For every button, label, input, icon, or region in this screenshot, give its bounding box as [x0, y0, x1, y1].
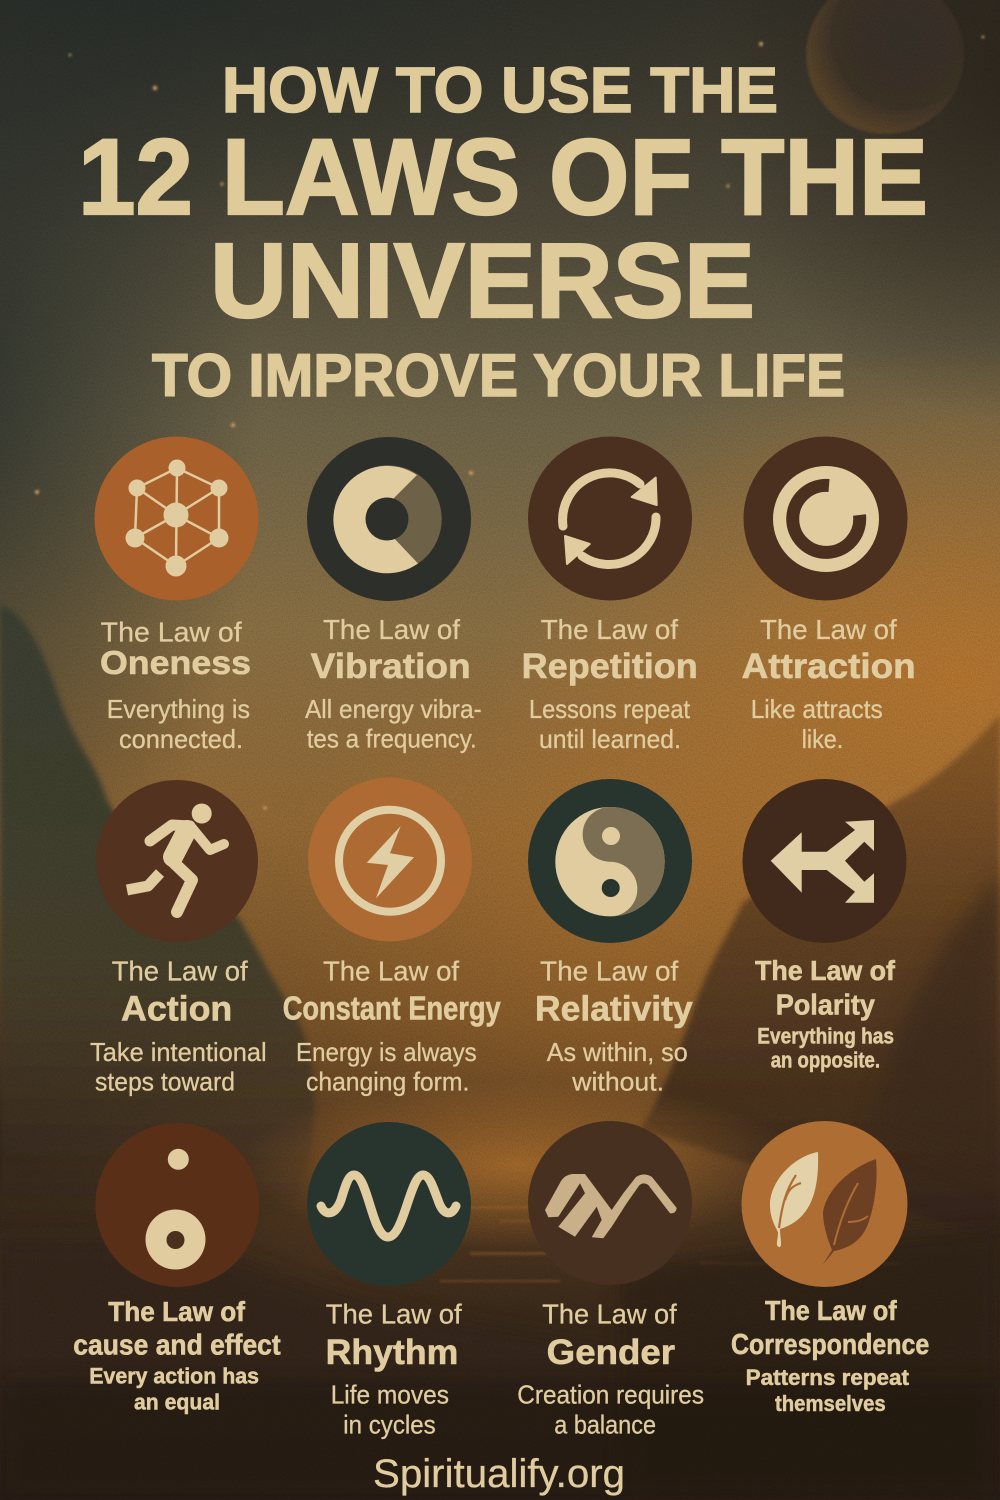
- label: repetition: [522, 614, 698, 754]
- panel: law of constant energy: [283, 778, 501, 1097]
- label: oneness: connected.: [119, 724, 243, 754]
- label: vibration: All energy vibra-: [305, 694, 482, 724]
- icon: dot and ring: [95, 1123, 259, 1287]
- icon: diverging arrows: [742, 779, 906, 943]
- icon: attraction spiral: [744, 436, 908, 600]
- panel: law of polarity: [742, 779, 906, 1073]
- label: correspondence: The Law of: [765, 1295, 897, 1326]
- label: relativity: The Law of: [540, 956, 679, 987]
- label: cause and effect: The Law of: [108, 1296, 246, 1327]
- title line: how to use the: HOW TO USE THE: [222, 54, 778, 126]
- label: gender: a balance: [554, 1409, 656, 1439]
- label: rhythm: The Law of: [326, 1298, 462, 1329]
- label: cause and effect: cause and effect: [73, 1329, 281, 1361]
- label: attraction: Like attracts: [751, 694, 883, 724]
- title line: 12 laws of the: 12 LAWS OF THE: [78, 116, 928, 237]
- panel: law of rhythm: [307, 1122, 471, 1439]
- label: rhythm: in cycles: [343, 1409, 436, 1439]
- label: rhythm: [326, 1298, 462, 1439]
- label: cause and effect: an equal: [134, 1389, 220, 1414]
- icon: lightning bolt: [308, 778, 472, 942]
- label: action: The Law of: [112, 956, 248, 987]
- label: gender: Gender: [547, 1333, 675, 1372]
- label: gender: The Law of: [542, 1298, 677, 1329]
- label: repetition: Repetition: [522, 647, 698, 686]
- label: attraction: The Law of: [760, 614, 897, 645]
- label: cause and effect: [73, 1296, 281, 1414]
- label: action: Take intentional: [90, 1037, 267, 1067]
- label: polarity: [755, 955, 896, 1073]
- label: action: [90, 956, 267, 1097]
- label: constant energy: [283, 956, 501, 1097]
- label: vibration: The Law of: [323, 614, 460, 645]
- label: oneness: [100, 616, 251, 754]
- icon: vibration ring: [307, 437, 471, 601]
- label: action: steps toward: [95, 1067, 235, 1097]
- footer: site name: Spiritualify.org: [373, 1452, 625, 1496]
- label: correspondence: [731, 1295, 929, 1416]
- icon: interlocking peaks: [528, 1121, 692, 1285]
- label: relativity: [535, 956, 693, 1097]
- label: vibration: [305, 614, 482, 754]
- label: repetition: until learned.: [539, 724, 681, 754]
- icon: circular arrows: [528, 436, 692, 600]
- label: rhythm: Life moves: [331, 1379, 449, 1409]
- label: polarity: Polarity: [776, 989, 875, 1021]
- label: polarity: The Law of: [755, 955, 896, 986]
- panel: law of relativity: [528, 779, 693, 1097]
- panel: law of attraction: [742, 436, 916, 754]
- label: cause and effect: Every action has: [89, 1363, 259, 1388]
- icon: wave: [307, 1122, 471, 1286]
- icon: two leaves: [742, 1121, 908, 1287]
- panel: law of vibration: [305, 437, 482, 754]
- icon: running figure: [96, 780, 258, 942]
- panel: law of action: [90, 780, 267, 1097]
- label: repetition: Lessons repeat: [529, 694, 691, 724]
- label: constant energy: changing form.: [306, 1067, 469, 1097]
- label: vibration: tes a frequency.: [307, 724, 477, 754]
- label: rhythm: Rhythm: [326, 1333, 458, 1372]
- label: oneness: Oneness: [100, 644, 251, 681]
- title line: universe: UNIVERSE: [210, 222, 755, 340]
- label: constant energy: Constant Energy: [283, 989, 501, 1026]
- icon: connected nodes: [94, 436, 258, 600]
- panel: law of correspondence: [731, 1121, 929, 1416]
- label: polarity: an opposite.: [771, 1048, 880, 1073]
- label: polarity: Everything has: [757, 1023, 894, 1048]
- label: oneness: Everything is: [107, 694, 250, 724]
- label: attraction: Attraction: [742, 647, 916, 686]
- label: attraction: [742, 614, 916, 754]
- label: action: Action: [121, 990, 232, 1029]
- moon: [806, 0, 964, 134]
- panel: law of repetition: [522, 436, 698, 754]
- label: relativity: Relativity: [535, 990, 693, 1029]
- label: gender: [517, 1298, 704, 1439]
- label: constant energy: Energy is always: [296, 1037, 477, 1067]
- label: oneness: The Law of: [101, 616, 242, 648]
- label: attraction: like.: [802, 724, 843, 754]
- label: correspondence: themselves: [775, 1391, 886, 1416]
- label: relativity: As within, so: [547, 1037, 688, 1067]
- label: gender: Creation requires: [517, 1379, 704, 1409]
- stars: [35, 36, 984, 810]
- icon: yin yang: [528, 779, 692, 943]
- panel: law of gender: [517, 1121, 704, 1439]
- title line: to improve your life: TO IMPROVE YOUR LIFE: [152, 342, 845, 409]
- label: relativity: without.: [571, 1067, 664, 1097]
- label: vibration: Vibration: [311, 647, 471, 686]
- label: correspondence: Patterns repeat: [746, 1365, 910, 1390]
- label: repetition: The Law of: [541, 614, 678, 645]
- panel: law of cause and effect: [73, 1123, 281, 1414]
- title: [78, 54, 928, 409]
- label: correspondence: Correspondence: [731, 1329, 929, 1361]
- label: constant energy: The Law of: [323, 956, 459, 987]
- panel: law of oneness: [94, 436, 258, 754]
